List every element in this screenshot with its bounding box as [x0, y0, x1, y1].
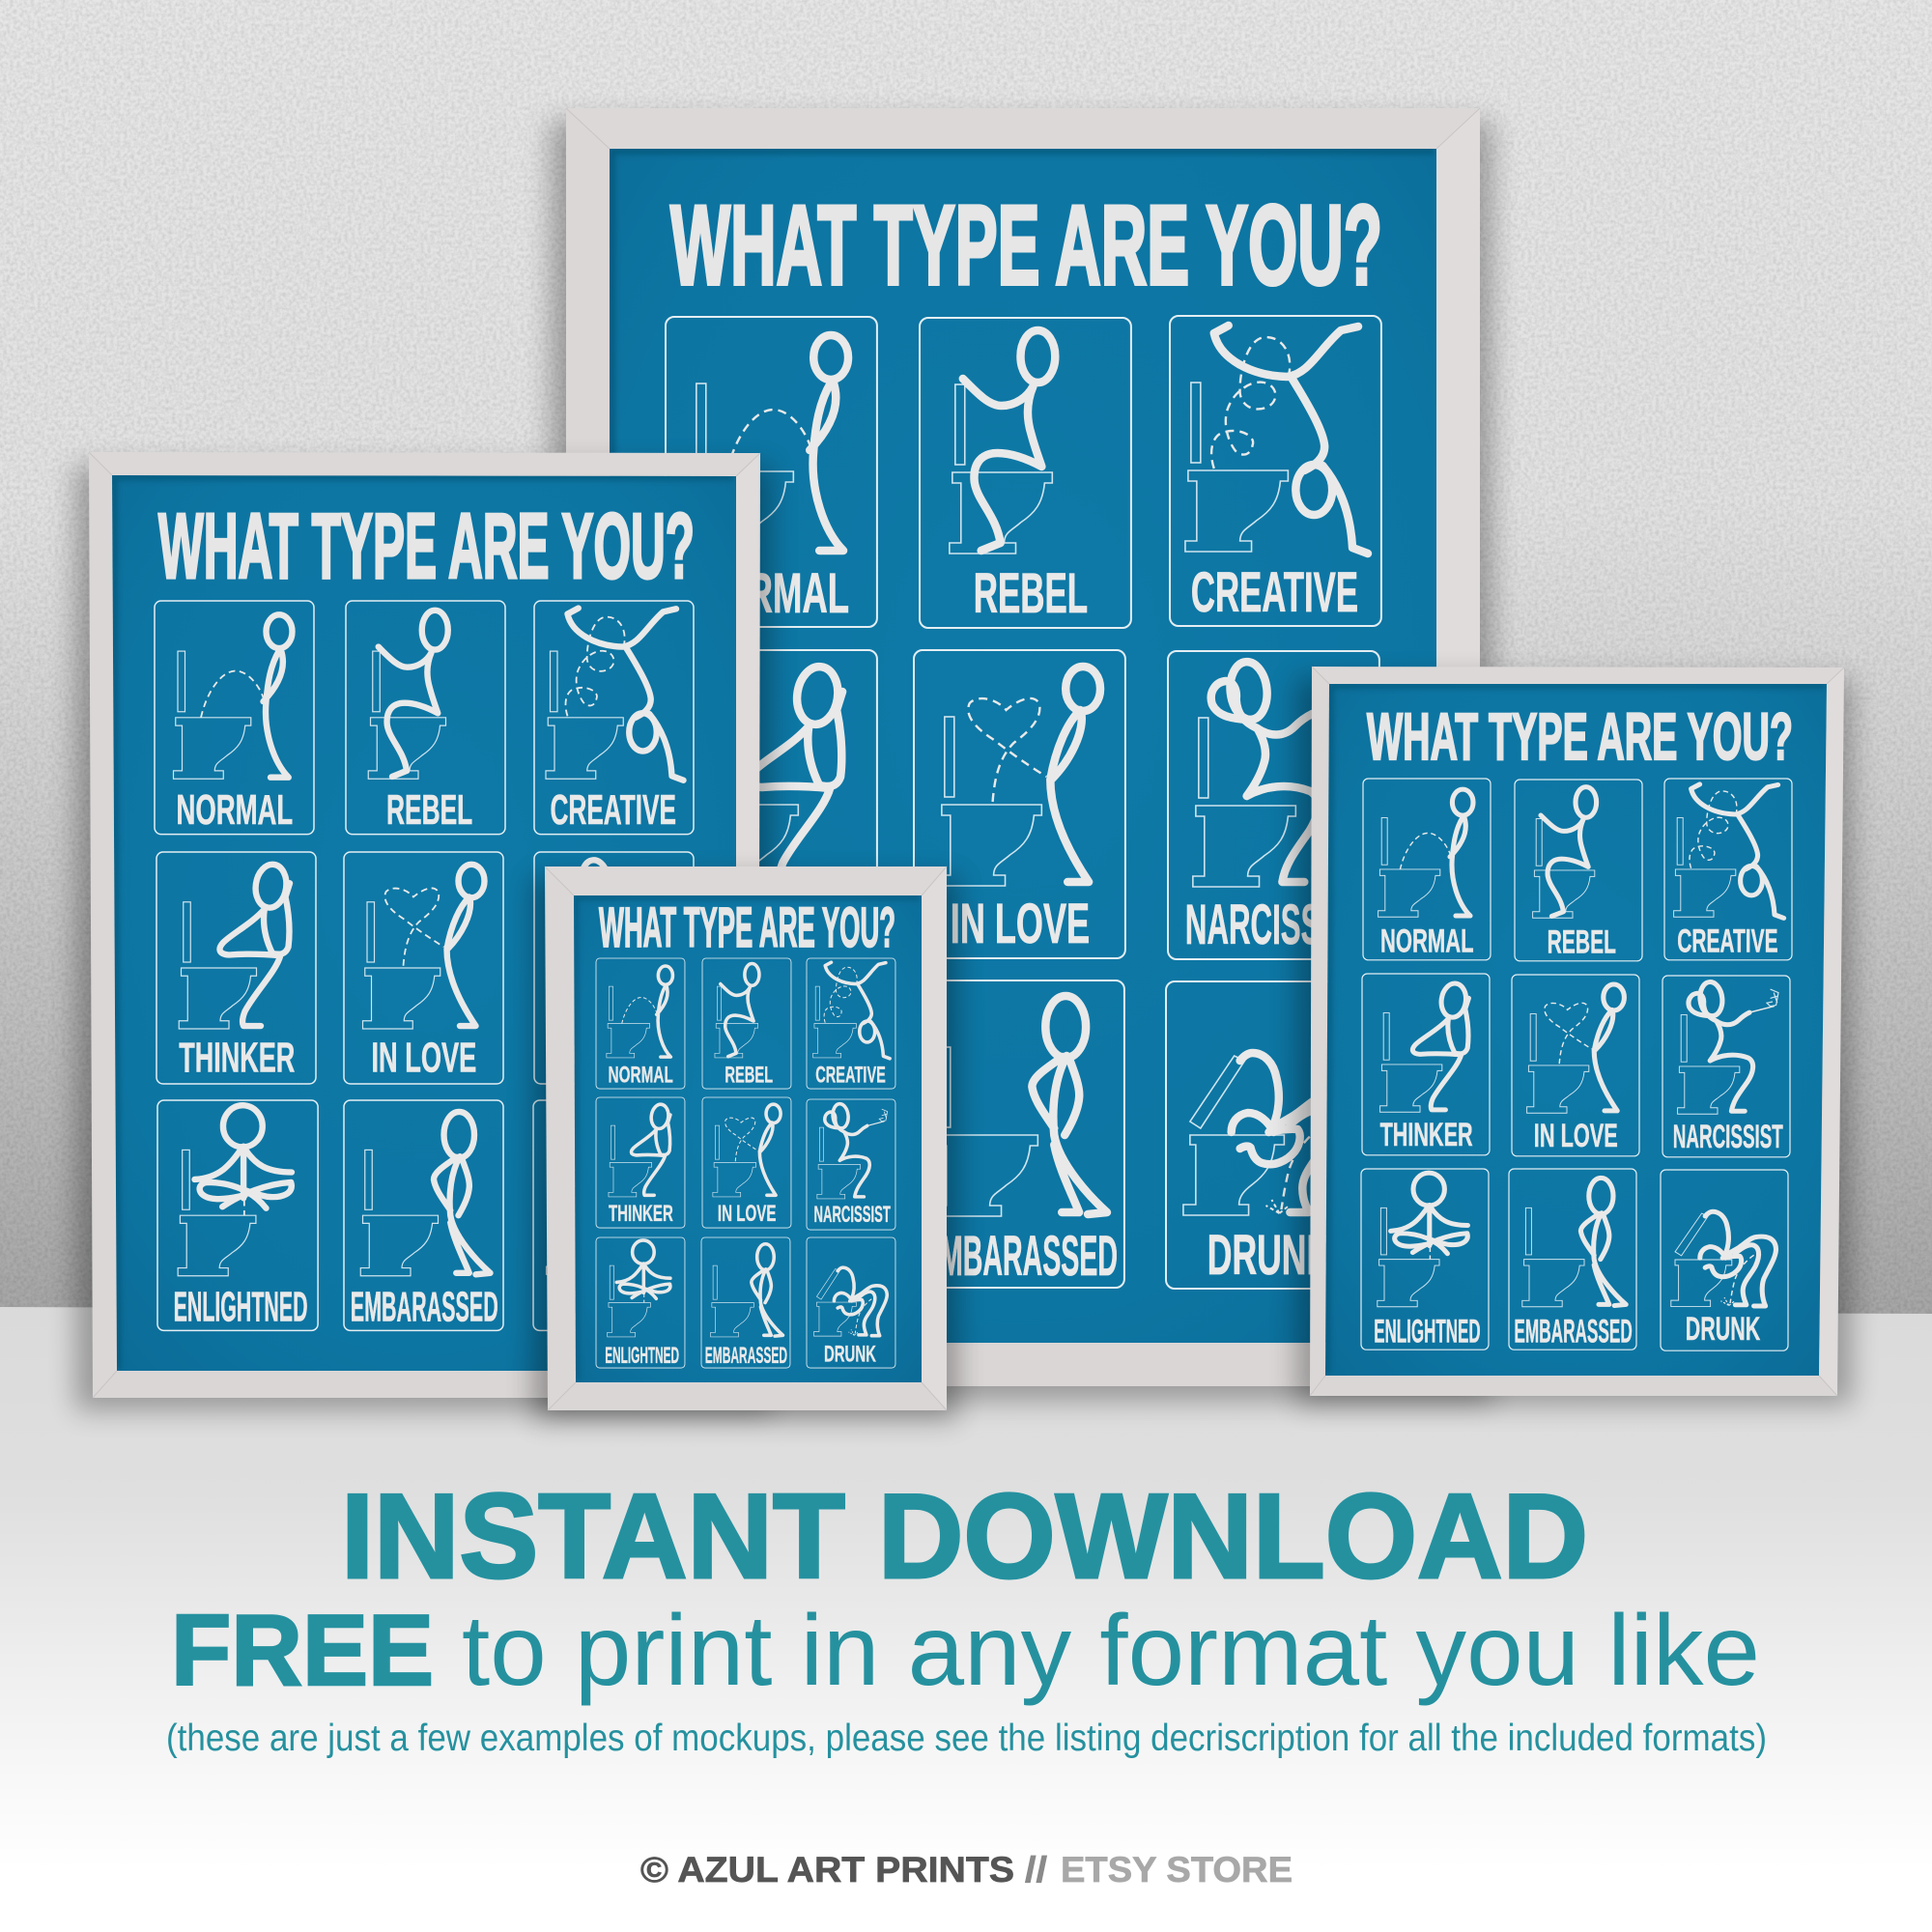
- cell: normal: NORMAL: [695, 563, 849, 625]
- cell: in love: [702, 1097, 791, 1228]
- poster: small centre: [533, 867, 957, 1420]
- cell: narcissist: NARCISSIST: [547, 1035, 685, 1081]
- cell: thinker: [666, 650, 877, 958]
- cell: drunk: [533, 1100, 693, 1330]
- headline: instant download: INSTANT DOWNLOAD: [341, 1470, 1588, 1604]
- cell: embarassed: EMBARASSED: [705, 1343, 787, 1369]
- cell: thinker: THINKER: [179, 1035, 295, 1081]
- cell: normal: [155, 601, 314, 835]
- cell: embarassed: EMBARASSED: [922, 1226, 1118, 1288]
- cell: normal: [596, 958, 685, 1089]
- cell: drunk: [807, 1237, 895, 1368]
- cell: in love: IN LOVE: [371, 1035, 476, 1081]
- poster: right: [1296, 667, 1852, 1405]
- cell: in love: [914, 650, 1125, 958]
- cell: drunk: DRUNK: [564, 1283, 658, 1329]
- cell: in love: IN LOVE: [951, 894, 1090, 955]
- cell: narcissist: [1662, 976, 1790, 1157]
- cell: drunk: DRUNK: [824, 1342, 876, 1368]
- cell: rebel: [346, 601, 505, 835]
- cell: in love: IN LOVE: [718, 1201, 776, 1227]
- poster: small centre: WHAT TYPE ARE YOU?: [599, 896, 895, 959]
- cell: rebel: [920, 318, 1131, 628]
- footer: store credit: //: [1025, 1850, 1047, 1889]
- footer: store credit: © AZUL ART PRINTS: [640, 1850, 1014, 1889]
- subheading: free to print: FREE: [171, 1595, 434, 1707]
- cell: in love: IN LOVE: [1534, 1118, 1618, 1154]
- cell: enlightened: ENLIGHTNED: [605, 1343, 679, 1369]
- cell: narcissist: [534, 852, 694, 1084]
- cell: creative: [807, 958, 895, 1089]
- cell: enlightened: ENLIGHTNED: [1374, 1314, 1481, 1350]
- cell: rebel: [1515, 780, 1642, 961]
- cell: enlightened: ENLIGHTNED: [174, 1285, 308, 1331]
- title: WHAT TYPE ARE YOU?: [670, 182, 1382, 308]
- cell: normal: NORMAL: [609, 1062, 673, 1088]
- cell: enlightened: [596, 1237, 685, 1369]
- cell: thinker: [596, 1097, 685, 1228]
- footer: store credit: [640, 1850, 1293, 1889]
- cell: narcissist: NARCISSIST: [1185, 895, 1368, 956]
- cell: in love: [1512, 975, 1639, 1156]
- cell: thinker: THINKER: [609, 1201, 673, 1227]
- footer: store credit: ETSY STORE: [1061, 1850, 1293, 1889]
- poster: large: [551, 108, 1492, 1401]
- cell: thinker: [156, 852, 316, 1084]
- cell: narcissist: NARCISSIST: [1673, 1119, 1783, 1155]
- cell: normal: NORMAL: [176, 786, 293, 834]
- cell: embarassed: EMBARASSED: [1514, 1314, 1633, 1350]
- cell: enlightened: ENLIGHTNED: [684, 1226, 861, 1288]
- cell: creative: CREATIVE: [551, 786, 676, 834]
- cell: thinker: THINKER: [1380, 1117, 1473, 1153]
- cell: embarassed: [913, 980, 1124, 1288]
- poster: left: [75, 452, 771, 1410]
- cell: enlightened: [663, 980, 874, 1288]
- floor background: [0, 1307, 1932, 1932]
- cell: narcissist: [1168, 651, 1379, 959]
- cell: creative: CREATIVE: [1677, 923, 1778, 960]
- wall background: [0, 0, 1932, 1314]
- cell: creative: [1170, 316, 1381, 626]
- title: WHAT TYPE ARE YOU?: [158, 495, 695, 598]
- cell: embarassed: [701, 1237, 790, 1369]
- cell: embarassed: EMBARASSED: [351, 1285, 498, 1331]
- note: mockups: (these are just a few examples of mockups, please see the listing decriscription for all the included formats): [166, 1718, 1767, 1759]
- cell: drunk: DRUNK: [1686, 1311, 1760, 1348]
- cell: creative: [1664, 779, 1792, 960]
- cell: embarassed: [1509, 1169, 1636, 1350]
- cell: drunk: [1166, 981, 1378, 1289]
- cell: creative: CREATIVE: [1191, 562, 1358, 624]
- cell: creative: CREATIVE: [815, 1062, 886, 1088]
- cell: normal: [1363, 779, 1491, 960]
- cell: normal: [666, 317, 877, 627]
- cell: embarassed: [344, 1100, 503, 1331]
- cell: rebel: REBEL: [1548, 924, 1616, 961]
- cell: drunk: DRUNK: [1208, 1225, 1331, 1287]
- cell: rebel: REBEL: [974, 563, 1088, 625]
- cell: enlightened: [157, 1100, 318, 1331]
- cell: thinker: THINKER: [696, 894, 849, 955]
- cell: narcissist: NARCISSIST: [814, 1202, 891, 1228]
- subheading: free to print: to print in any format you like: [462, 1595, 1760, 1707]
- cell: enlightened: [1361, 1169, 1489, 1350]
- cell: thinker: [1362, 974, 1490, 1155]
- cell: rebel: REBEL: [386, 786, 472, 834]
- cell: creative: [534, 601, 694, 835]
- cell: drunk: [1661, 1170, 1788, 1350]
- cell: normal: NORMAL: [1380, 923, 1474, 960]
- cell: in love: [344, 852, 503, 1084]
- cell: narcissist: [807, 1099, 895, 1230]
- cell: rebel: [702, 958, 791, 1089]
- cell: rebel: REBEL: [724, 1062, 773, 1088]
